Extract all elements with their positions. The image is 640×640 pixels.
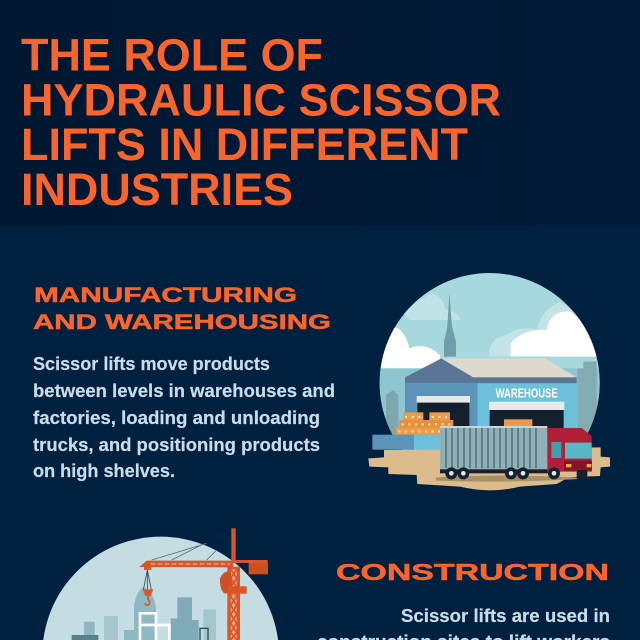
heading: manufacturing and warehousing: MANUFACTURING (34, 283, 297, 307)
heading: manufacturing and warehousing (33, 283, 331, 334)
boxes (396, 412, 532, 435)
text block: manufacturing description (33, 354, 335, 481)
heading: construction: CONSTRUCTION (336, 559, 609, 585)
header band (0, 0, 640, 226)
heading: manufacturing and warehousing: AND WAREHOUSING (33, 310, 331, 334)
ground and loading dock (368, 435, 610, 490)
text block: manufacturing description: Scissor lifts move products (33, 354, 270, 374)
text block: manufacturing description: between levels in warehouses and (33, 381, 335, 401)
title: INDUSTRIES (21, 164, 293, 215)
text block: manufacturing description: on high shelves. (33, 461, 175, 481)
tower crane (139, 528, 268, 640)
illustration: construction site and crane (40, 528, 283, 640)
text block: manufacturing description: trucks, and positioning products (33, 435, 320, 455)
title: HYDRAULIC SCISSOR (21, 74, 501, 126)
text block: manufacturing description: factories, loading and unloading (33, 408, 320, 428)
title: THE ROLE OF (21, 30, 323, 80)
text block: construction description (317, 606, 610, 640)
warehouse sign: WAREHOUSE (496, 386, 558, 401)
text block: construction description: Scissor lifts are used in (401, 606, 610, 626)
illustration: warehouse and truck (368, 270, 610, 490)
title: LIFTS IN DIFFERENT (21, 119, 468, 170)
warehouse building (405, 358, 577, 437)
title (21, 30, 501, 215)
delivery truck (436, 426, 592, 482)
sky circle with clouds and skyline (377, 270, 603, 450)
circle with city skyline (40, 533, 283, 640)
